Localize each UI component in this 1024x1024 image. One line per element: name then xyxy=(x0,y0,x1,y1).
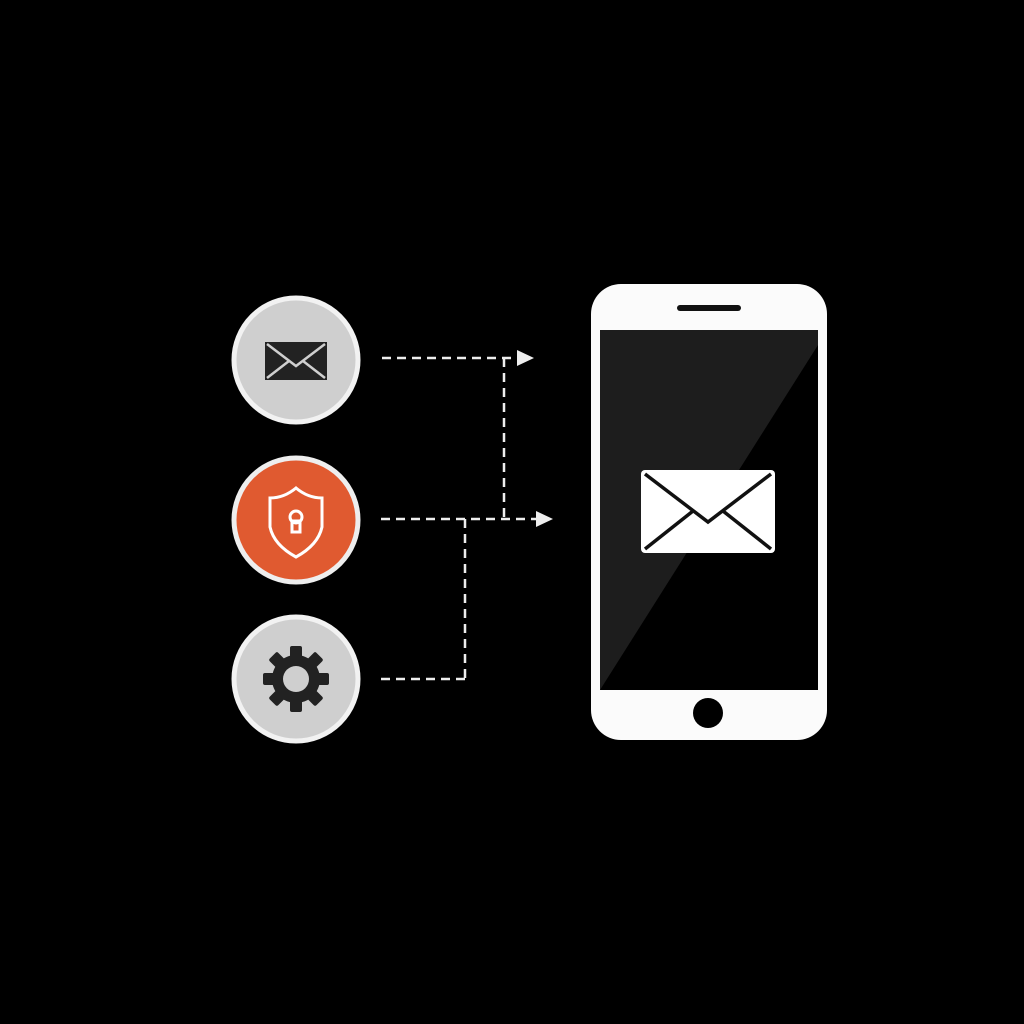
icon: phone envelope xyxy=(641,470,775,553)
arrowheads xyxy=(517,350,553,527)
phone xyxy=(591,284,827,740)
icon: security shield circle xyxy=(234,458,358,582)
icon: mail circle xyxy=(234,298,358,422)
arrow: connectors xyxy=(381,358,536,679)
icon: settings gear circle xyxy=(234,617,358,741)
